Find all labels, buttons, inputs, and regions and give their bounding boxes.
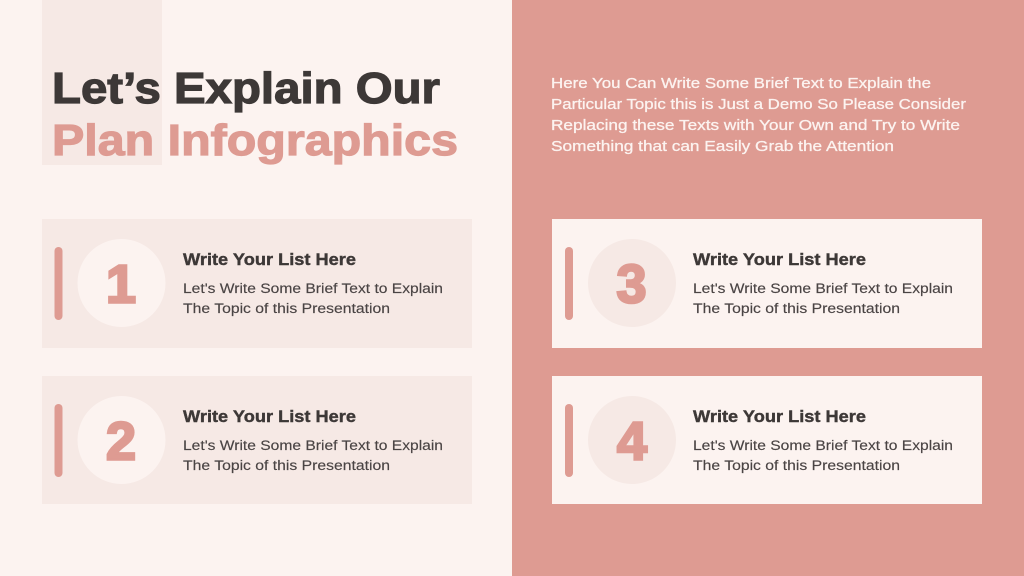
number badge 2 <box>78 396 166 484</box>
intro paragraph: Replacing these Texts with Your Own and Try to Write <box>551 117 960 134</box>
intro paragraph: Particular Topic this is Just a Demo So Please Consider <box>551 96 966 113</box>
title: Plan Infographics <box>52 116 458 165</box>
intro paragraph: Something that can Easily Grab the Attention <box>551 138 894 155</box>
intro paragraph: Here You Can Write Some Brief Text to Explain the <box>551 75 931 92</box>
intro paragraph <box>551 75 966 155</box>
item 3 text <box>693 250 953 317</box>
item 2 text <box>183 407 443 474</box>
item 4 text <box>693 407 953 474</box>
item 2 text: Write Your List Here <box>183 407 356 426</box>
panel: right background <box>512 0 1024 576</box>
number badge 2: 2 <box>106 412 136 472</box>
accent bar 3 <box>565 247 573 320</box>
item 3 text: The Topic of this Presentation <box>693 301 900 317</box>
number badge 3: 3 <box>616 254 647 314</box>
panel: list item 1 <box>42 219 472 348</box>
accent bar 4 <box>565 404 573 477</box>
item 4 text: The Topic of this Presentation <box>693 458 900 474</box>
panel: list item 3 <box>552 219 982 348</box>
item 1 text: Write Your List Here <box>183 250 356 269</box>
number badge 4 <box>588 396 676 484</box>
title: Let’s Explain Our <box>52 64 440 113</box>
accent bar 2 <box>54 404 62 477</box>
item 4 text: Write Your List Here <box>693 407 866 426</box>
number badge 3 <box>588 239 676 327</box>
item 1 text <box>183 250 443 317</box>
item 2 text: The Topic of this Presentation <box>183 458 390 474</box>
title <box>52 64 458 165</box>
accent bar 1 <box>54 247 62 320</box>
item 4 text: Let's Write Some Brief Text to Explain <box>693 438 953 454</box>
item 2 text: Let's Write Some Brief Text to Explain <box>183 438 443 454</box>
panel: list item 2 <box>42 376 472 504</box>
item 1 text: Let's Write Some Brief Text to Explain <box>183 281 443 297</box>
panel: list item 4 <box>552 376 982 504</box>
number badge 4: 4 <box>617 412 647 472</box>
number badge 1: 1 <box>106 254 136 314</box>
number badge 1 <box>78 239 166 327</box>
item 3 text: Write Your List Here <box>693 250 866 269</box>
title accent block <box>42 0 162 165</box>
item 1 text: The Topic of this Presentation <box>183 301 390 317</box>
item 3 text: Let's Write Some Brief Text to Explain <box>693 281 953 297</box>
